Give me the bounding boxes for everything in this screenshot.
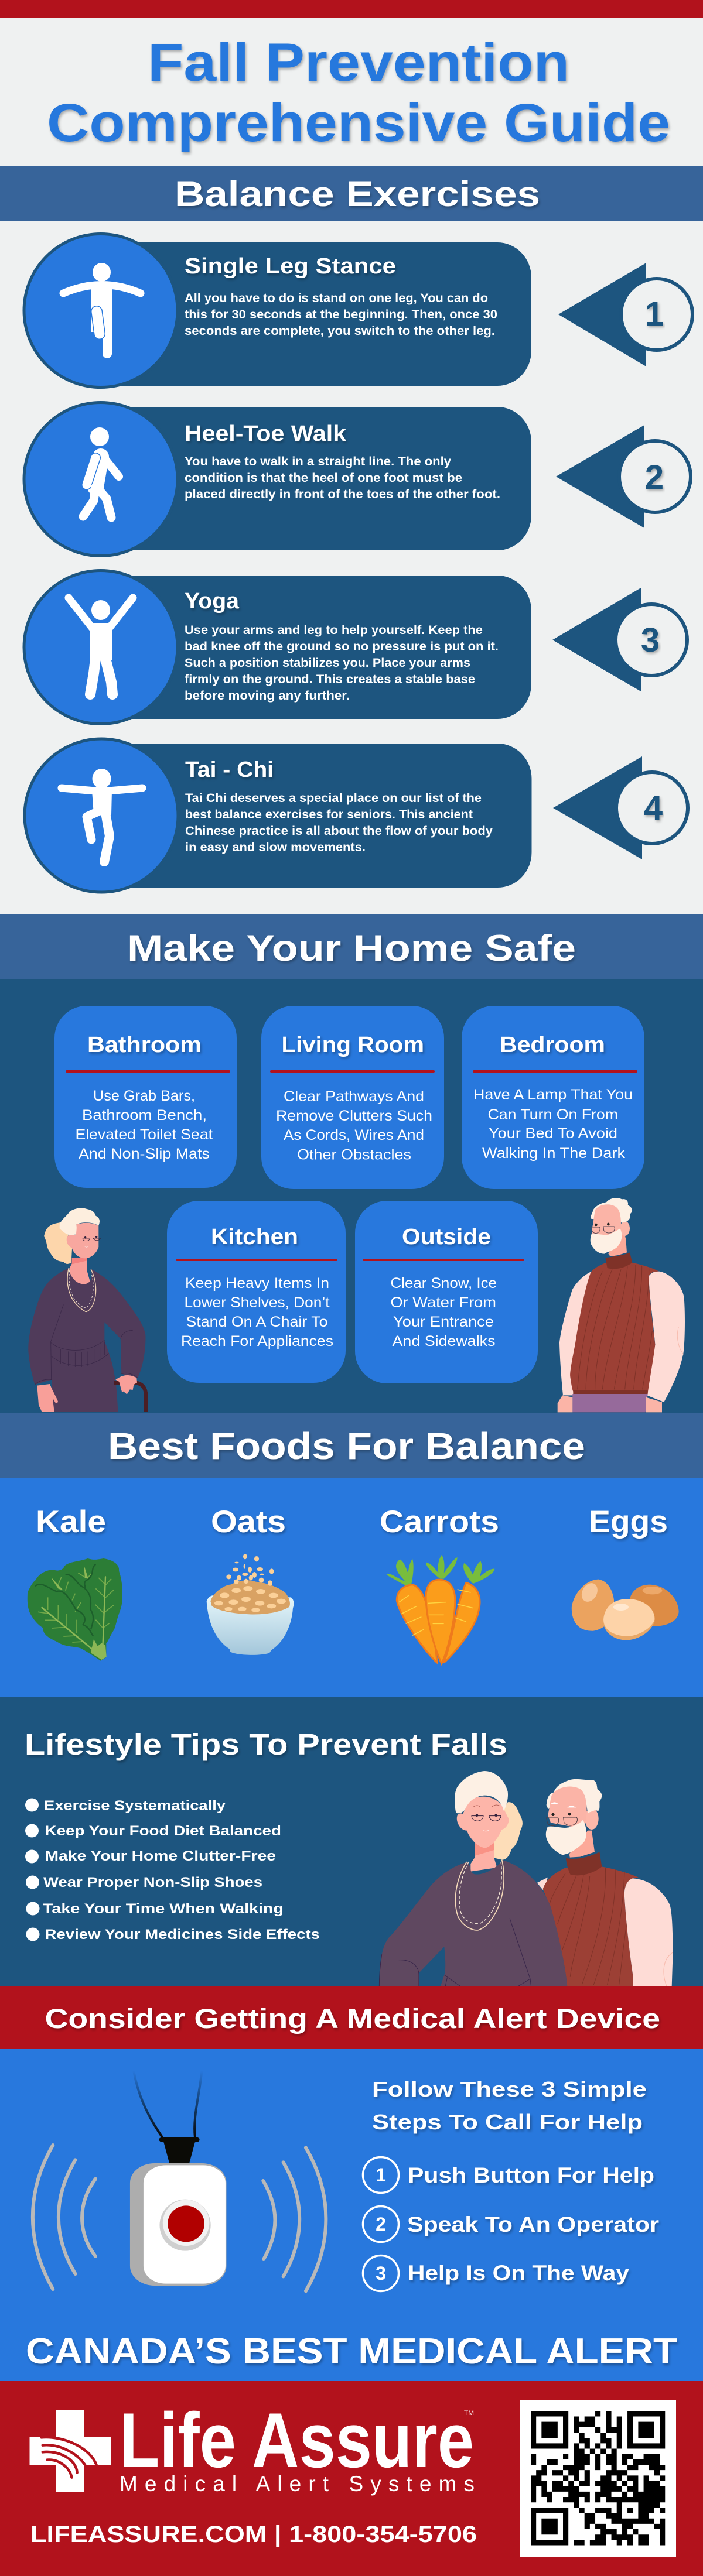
label: carrots: Carrots — [380, 1505, 499, 1539]
heading banner: best foods for balance — [0, 1413, 703, 1478]
text: yoga description: Such a position stabilizes you. Place your arms — [185, 656, 470, 670]
logo mark: cross — [29, 2410, 111, 2492]
section: lifestyle tips — [0, 1697, 703, 1986]
card: living room: Other Obstacles — [297, 1146, 411, 1163]
card: bedroom: Have A Lamp That You — [473, 1087, 633, 1103]
bullet list: Exercise Systematically — [44, 1798, 226, 1814]
text: yoga description: before moving any further. — [185, 689, 350, 703]
card: bathroom: Bathroom — [87, 1033, 202, 1057]
card: kitchen: Lower Shelves, Don’t — [184, 1294, 330, 1311]
card: living room: As Cords, Wires And — [284, 1127, 424, 1143]
card: bedroom: Walking In The Dark — [482, 1145, 626, 1162]
bullet list — [25, 1798, 320, 1943]
card: bathroom: Elevated Toilet Seat — [75, 1126, 213, 1143]
wordmark: Life Assure — [120, 2397, 474, 2484]
icon: single leg stance figure — [24, 234, 178, 388]
section: make your home safe — [0, 914, 703, 1413]
step 1: 1 — [376, 2164, 386, 2186]
card: outside: Outside — [402, 1225, 491, 1249]
heading banner: make your home safe: Make Your Home Safe — [127, 928, 576, 969]
step 2 — [363, 2206, 659, 2242]
footer — [0, 2381, 703, 2576]
icon: bowl of oats — [207, 1554, 294, 1655]
step 2: Speak To An Operator — [407, 2212, 659, 2236]
heading: yoga: Yoga — [185, 589, 240, 614]
card: outside: Clear Snow, Ice — [390, 1275, 497, 1292]
arrow: number 3 — [552, 588, 687, 691]
signal waves — [33, 2145, 326, 2291]
label: oats: Oats — [211, 1505, 286, 1539]
heading banner: balance exercises — [0, 166, 703, 221]
icon: kale — [28, 1559, 121, 1660]
icon: yoga figure — [24, 570, 178, 724]
step 2: 2 — [376, 2214, 386, 2235]
label: eggs: Eggs — [589, 1505, 668, 1539]
icon: medical alert pendant — [33, 2071, 326, 2291]
card: bathroom — [54, 1006, 237, 1188]
card: yoga — [24, 570, 531, 724]
card: living room: Remove Clutters Such — [276, 1108, 432, 1124]
icon: tai chi figure — [25, 739, 178, 892]
title — [47, 33, 670, 153]
section: best foods for balance — [0, 1413, 703, 1697]
arrow: number 2 — [556, 425, 691, 528]
card: living room — [261, 1006, 444, 1189]
trademark: TM — [464, 2410, 474, 2417]
card: outside — [355, 1201, 538, 1383]
card: outside: And Sidewalks — [393, 1333, 496, 1349]
tagline: Medical Alert Systems — [120, 2472, 475, 2496]
text: heel-toe walk description: placed directly in front of the toes of the other foot. — [185, 488, 500, 501]
step 1: Push Button For Help — [408, 2163, 654, 2187]
text: single leg stance description — [185, 292, 497, 338]
bullet list: Review Your Medicines Side Effects — [45, 1927, 320, 1943]
illustration: older couple — [379, 1771, 673, 1986]
arrow: number 4 — [553, 756, 688, 859]
text: yoga description: Use your arms and leg to help yourself. Keep the — [185, 624, 483, 637]
step 3: 3 — [376, 2263, 386, 2284]
text: follow these 3 simple steps: Steps To Call For Help — [372, 2110, 643, 2134]
illustration: older woman with cane — [28, 1208, 146, 1412]
bullet list: Wear Proper Non-Slip Shoes — [43, 1875, 262, 1890]
card: tai chi — [25, 739, 532, 892]
card: bathroom: And Non-Slip Mats — [79, 1146, 210, 1162]
card: bathroom: Use Grab Bars, — [93, 1088, 195, 1104]
text: heel-toe walk description: condition is that the heel of one foot must be — [185, 471, 462, 485]
card: bedroom: Can Turn On From — [487, 1107, 618, 1123]
bullet list: Take Your Time When Walking — [43, 1901, 284, 1917]
section: medical alert device — [0, 1986, 703, 2381]
text: yoga description: bad knee off the ground so no pressure is put on it. — [185, 640, 499, 653]
heading banner: best foods for balance: Best Foods For Balance — [108, 1425, 585, 1467]
text: heel-toe walk description — [185, 455, 500, 501]
text: yoga description: firmly on the ground. This creates a stable base — [185, 673, 475, 686]
arrow: number 4: 4 — [644, 789, 663, 827]
contact line: LIFEASSURE.COM | 1-800-354-5706 — [30, 2522, 477, 2547]
heading: canada's best medical alert: CANADA’S BEST MEDICAL ALERT — [26, 2331, 677, 2372]
arrow: number 1 — [558, 263, 692, 366]
text: tai chi description: best balance exercises for seniors. This ancient — [185, 808, 473, 821]
text: follow these 3 simple steps — [372, 2077, 647, 2134]
card: single leg stance — [24, 234, 531, 388]
card: bathroom: Bathroom Bench, — [82, 1107, 207, 1123]
card: heel-toe walk — [24, 403, 531, 556]
card: outside: Or Water From — [390, 1294, 496, 1311]
text: single leg stance description: All you have to do is stand on one leg, You can do — [185, 292, 488, 305]
bullet list: Make Your Home Clutter-Free — [45, 1848, 276, 1864]
icon: eggs — [572, 1580, 679, 1640]
heading banner: consider getting a medical alert device — [0, 1986, 703, 2049]
text: tai chi description: in easy and slow movements. — [185, 841, 366, 854]
card: kitchen: Reach For Appliances — [181, 1333, 333, 1349]
step 3: Help Is On The Way — [408, 2261, 629, 2285]
illustration: older man with vest — [558, 1198, 685, 1412]
top red bar — [0, 0, 703, 18]
step 3 — [363, 2255, 629, 2291]
card: living room: Living Room — [281, 1033, 424, 1057]
text: follow these 3 simple steps: Follow These 3 Simple — [372, 2077, 647, 2101]
arrow: number 2: 2 — [645, 458, 664, 496]
icon: heel-toe walk figure — [24, 403, 178, 556]
heading: tai chi: Tai - Chi — [185, 758, 274, 782]
text: tai chi description — [185, 792, 493, 854]
heading: lifestyle tips to prevent falls: Lifestyle Tips To Prevent Falls — [25, 1728, 507, 1761]
logo: life assure — [29, 2397, 475, 2496]
qr code — [520, 2400, 676, 2557]
label: kale: Kale — [36, 1505, 106, 1539]
bullet list: Keep Your Food Diet Balanced — [45, 1823, 281, 1839]
card: bedroom: Your Bed To Avoid — [489, 1125, 617, 1142]
card: kitchen: Keep Heavy Items In — [185, 1275, 329, 1292]
arrow: number 1: 1 — [645, 295, 664, 333]
heading banner: make your home safe — [0, 914, 703, 979]
card: kitchen: Stand On A Chair To — [186, 1314, 328, 1330]
card: kitchen — [167, 1201, 346, 1383]
section: balance exercises — [0, 166, 703, 892]
text: tai chi description: Tai Chi deserves a special place on our list of the — [185, 792, 482, 805]
arrow: number 3: 3 — [641, 621, 660, 659]
title: Comprehensive Guide — [47, 93, 670, 153]
text: single leg stance description: this for 30 seconds at the beginning. Then, once 30 — [185, 308, 497, 321]
card: bedroom: Bedroom — [500, 1033, 605, 1057]
step 1 — [363, 2157, 654, 2193]
title: Fall Prevention — [148, 33, 569, 93]
heading banner: balance exercises: Balance Exercises — [175, 174, 540, 214]
heading banner: consider getting a medical alert device: Consider Getting A Medical Alert Device — [45, 2003, 660, 2034]
card: living room: Clear Pathways And — [284, 1088, 424, 1105]
heading: heel-toe walk: Heel-Toe Walk — [185, 422, 347, 446]
heading: single leg stance: Single Leg Stance — [185, 254, 396, 279]
text: single leg stance description: seconds are complete, you switch to the other leg. — [185, 324, 495, 338]
card: bedroom — [462, 1006, 644, 1189]
icon: carrots — [387, 1555, 494, 1664]
card: kitchen: Kitchen — [211, 1225, 298, 1249]
card: outside: Your Entrance — [393, 1314, 494, 1330]
text: yoga description — [185, 624, 499, 703]
text: heel-toe walk description: You have to walk in a straight line. The only — [185, 455, 451, 468]
text: tai chi description: Chinese practice is all about the flow of your body — [185, 824, 493, 838]
